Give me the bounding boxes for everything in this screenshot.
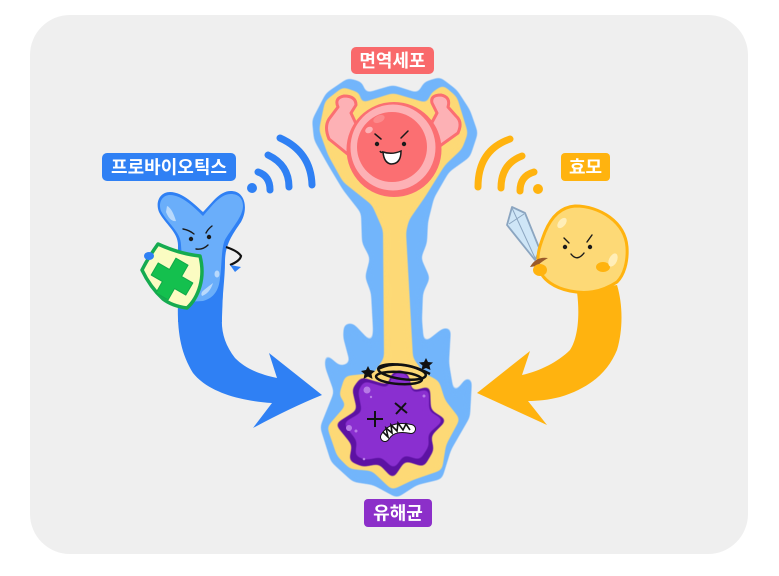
cell body [346,102,442,197]
blue signal waves [247,138,312,193]
highlights [555,216,569,230]
hand [144,252,154,260]
face [375,131,408,139]
label: probiotics [102,153,236,181]
arm [226,247,241,265]
immune cell stem and halo [312,77,478,498]
arms [326,96,358,156]
yellow arrow [477,285,622,425]
dizzy spiral [376,362,430,386]
icon: green cross [145,252,199,306]
stars [361,366,375,379]
x eyes [367,403,407,427]
body highlight fill [160,194,243,302]
blue halo [312,77,478,498]
yellow halo [319,85,468,490]
label: probiotics: 프로바이오틱스 [111,158,227,178]
sword [507,207,540,260]
sword guard [530,258,548,267]
yellow signal waves [478,139,543,194]
yeast character [507,206,627,292]
label: harmful bacteria [364,499,432,527]
mouth [385,428,411,437]
label: immune cell [351,47,434,74]
label: immune cell: 면역세포 [359,51,426,71]
face [183,226,212,249]
hand [533,264,547,276]
label: yeast [561,153,610,181]
cheek hand [596,262,610,272]
icon: shield [142,244,202,308]
harmful bacterium [335,358,447,479]
immune cell character [326,95,460,197]
probiotic character [142,191,245,322]
body [158,191,245,322]
blue arrow [178,290,322,428]
highlights [166,206,176,221]
label: harmful bacteria: 유해균 [373,504,423,524]
label: yeast: 효모 [569,158,602,178]
head [538,206,627,292]
body [335,369,447,479]
face [564,235,592,258]
